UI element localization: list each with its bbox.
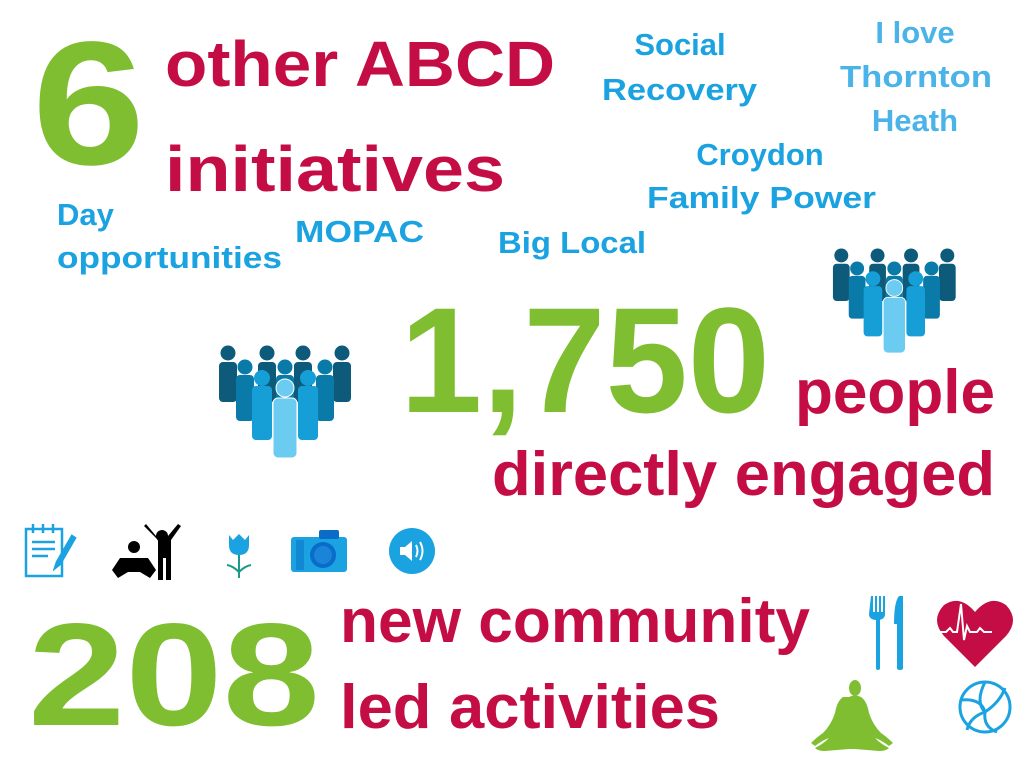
icon: volleyball: [960, 682, 1010, 732]
initiative names: Family Power: [647, 180, 876, 215]
icon: speaker: [389, 528, 435, 574]
icon: fork and knife: [869, 596, 903, 670]
icon: people group left: [219, 346, 351, 458]
icon: meditation figure: [811, 680, 893, 751]
number 1,750: 1,750: [400, 276, 770, 444]
initiative: I love Thornton Heath: Heath: [872, 103, 958, 138]
icon: people group right: [833, 248, 956, 353]
initiative names: Recovery: [602, 72, 758, 107]
initiative names: Croydon: [696, 137, 824, 172]
initiative names: Big Local: [498, 225, 646, 260]
heading: other ABCD initiatives: [165, 28, 555, 205]
initiative: I love Thornton Heath: Thornton: [840, 59, 992, 94]
icon: exercise figures: [112, 524, 181, 580]
icon: tulip: [227, 534, 251, 578]
initiative names: MOPAC: [295, 214, 424, 249]
initiative names: opportunities: [57, 240, 282, 275]
initiative names: Day: [57, 197, 115, 232]
icon: camera: [291, 530, 347, 572]
initiative names: Social: [634, 27, 726, 62]
text: people directly engaged: people: [795, 358, 995, 427]
initiative names: [57, 27, 876, 275]
icon: heart with ECG: [936, 601, 1013, 667]
text: people directly engaged: directly engaged: [492, 440, 995, 509]
text: new community led activities: led activities: [340, 673, 720, 742]
text: people directly engaged: [492, 358, 995, 509]
icon: notepad: [26, 524, 75, 576]
initiative: I love Thornton Heath: [840, 15, 992, 138]
initiative: I love Thornton Heath: I love: [875, 15, 955, 50]
number 6: 6: [32, 6, 145, 202]
number 208: 208: [28, 593, 320, 756]
text: new community led activities: new community: [340, 587, 811, 656]
heading: other ABCD initiatives: initiatives: [165, 133, 505, 205]
heading: other ABCD initiatives: other ABCD: [165, 28, 555, 100]
text: new community led activities: [340, 587, 811, 742]
